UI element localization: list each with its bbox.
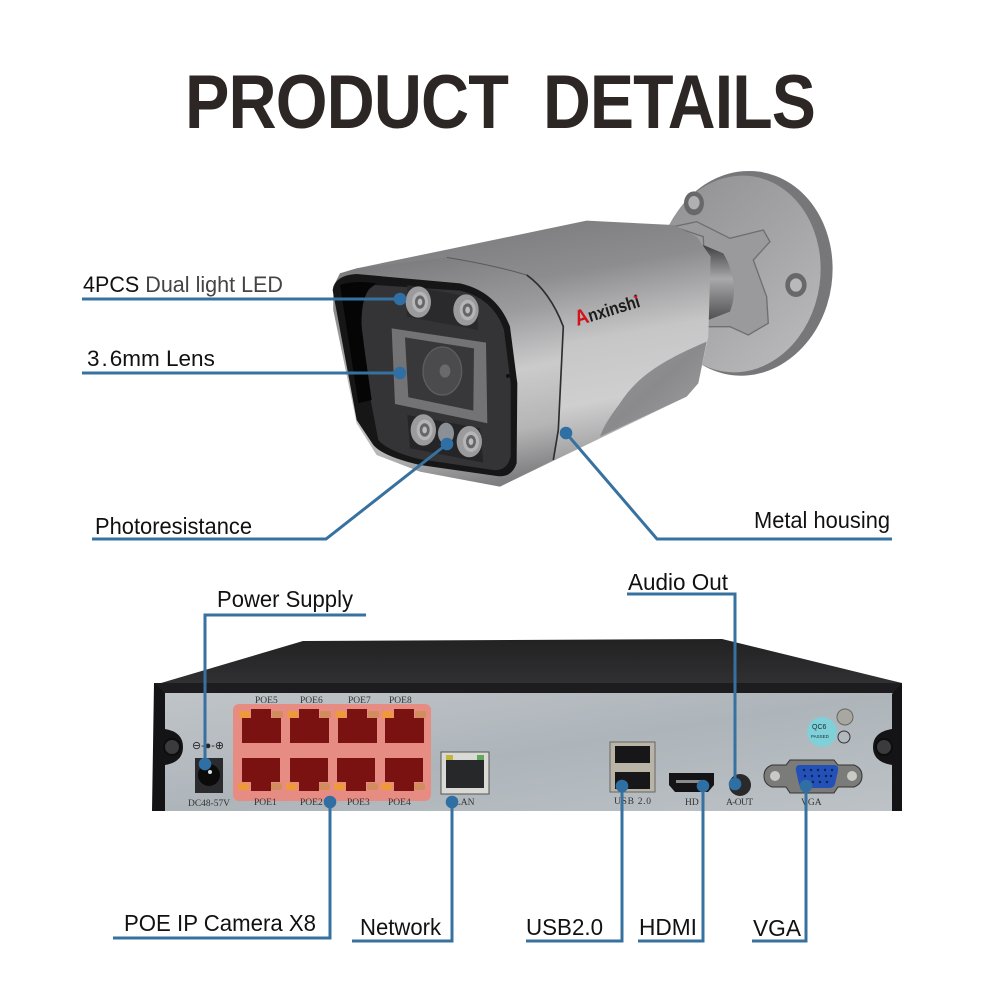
callout: USB2.0 bbox=[526, 780, 628, 941]
audio out jack: A-OUT bbox=[726, 798, 753, 808]
LAN port: LAN bbox=[455, 798, 475, 808]
callout: 4PCS Dual light LED: 4PCS Dual light LED bbox=[83, 272, 283, 297]
callout: Metal housing: Metal housing bbox=[754, 507, 890, 533]
recorder top lid bbox=[161, 639, 902, 683]
right side bracket bbox=[873, 683, 902, 811]
camera photo illustration bbox=[333, 160, 846, 487]
callout: Photoresistance: Photoresistance bbox=[95, 513, 252, 539]
microphone hole bbox=[506, 374, 510, 378]
audio out jack bbox=[726, 774, 753, 808]
callout: HDMI bbox=[638, 780, 709, 941]
callout: Metal housing bbox=[560, 427, 892, 539]
LAN port bbox=[441, 752, 489, 808]
callout: HDMI: HDMI bbox=[639, 914, 697, 940]
POE port labels top: POE7 bbox=[348, 696, 371, 706]
callout: POE IP Camera X8: POE IP Camera X8 bbox=[124, 910, 316, 936]
lens bbox=[423, 347, 462, 395]
brand logo: Anxinshi bbox=[571, 287, 643, 331]
front shell bbox=[333, 257, 563, 487]
POE port labels top: POE8 bbox=[389, 696, 412, 706]
VGA port bbox=[764, 760, 862, 808]
POE highlighted port block bbox=[233, 704, 431, 801]
mount bracket bbox=[673, 222, 770, 335]
QC sticker bbox=[807, 717, 837, 747]
bottom LED module bbox=[407, 414, 483, 463]
network video recorder bbox=[152, 639, 902, 811]
callout: VGA bbox=[752, 780, 812, 941]
top LED module bbox=[406, 285, 479, 330]
HDMI port bbox=[669, 773, 714, 808]
callout: 3.6mm Lens: 3.6mm Lens bbox=[87, 346, 215, 371]
lens window frame bbox=[392, 328, 487, 423]
callout: Photoresistance bbox=[92, 438, 453, 539]
VGA port: VGA bbox=[801, 798, 822, 808]
POE port labels bottom: POE4 bbox=[388, 798, 411, 808]
USB ports bbox=[610, 742, 655, 807]
recorder front lip bbox=[154, 683, 902, 694]
POE port labels top: POE5 bbox=[255, 696, 278, 706]
right screw bbox=[876, 739, 892, 755]
DC power jack: ⊖-●-⊕ bbox=[192, 740, 224, 752]
POE port labels bottom: POE3 bbox=[347, 798, 370, 808]
callout: VGA: VGA bbox=[753, 915, 802, 941]
ground screw bbox=[837, 709, 853, 725]
callout: POE IP Camera X8 bbox=[113, 796, 336, 938]
callout: USB2.0: USB2.0 bbox=[526, 914, 603, 940]
neck bbox=[703, 245, 734, 320]
callout: Audio Out: Audio Out bbox=[628, 569, 729, 595]
title bbox=[185, 60, 815, 145]
recorder back plate bbox=[165, 693, 893, 811]
DC power jack: DC48-57V bbox=[188, 799, 230, 809]
left screw bbox=[164, 739, 180, 755]
photoresistor bbox=[438, 423, 454, 444]
callout: Audio Out bbox=[627, 569, 741, 790]
title: DETAILS bbox=[543, 60, 815, 145]
callout: Network: Network bbox=[360, 914, 441, 940]
POE port labels bottom bbox=[254, 798, 411, 808]
front face rim bbox=[333, 274, 517, 476]
front face bbox=[358, 285, 511, 470]
POE port labels bottom: POE2 bbox=[300, 798, 323, 808]
POE port labels top: POE6 bbox=[300, 696, 323, 706]
POE port labels bottom: POE1 bbox=[254, 798, 277, 808]
camera housing bbox=[333, 221, 711, 487]
wall mount disk bbox=[643, 160, 846, 387]
POE port labels top bbox=[255, 696, 412, 706]
callout: Network bbox=[352, 796, 458, 941]
QC sticker: QC6 bbox=[812, 724, 826, 731]
housing lower panel shading bbox=[600, 342, 707, 437]
ground symbol bbox=[838, 731, 850, 743]
title: PRODUCT bbox=[185, 60, 508, 145]
callout: Power Supply bbox=[199, 586, 366, 770]
USB ports: USB 2.0 bbox=[614, 797, 651, 807]
callout: 4PCS Dual light LED bbox=[82, 272, 406, 305]
HDMI port: HD bbox=[685, 798, 699, 808]
callout: 3.6mm Lens bbox=[82, 346, 406, 379]
QC sticker: PASSED bbox=[811, 734, 830, 739]
DC power jack bbox=[188, 740, 230, 809]
left side bracket bbox=[152, 683, 183, 811]
callout: Power Supply: Power Supply bbox=[217, 586, 353, 612]
